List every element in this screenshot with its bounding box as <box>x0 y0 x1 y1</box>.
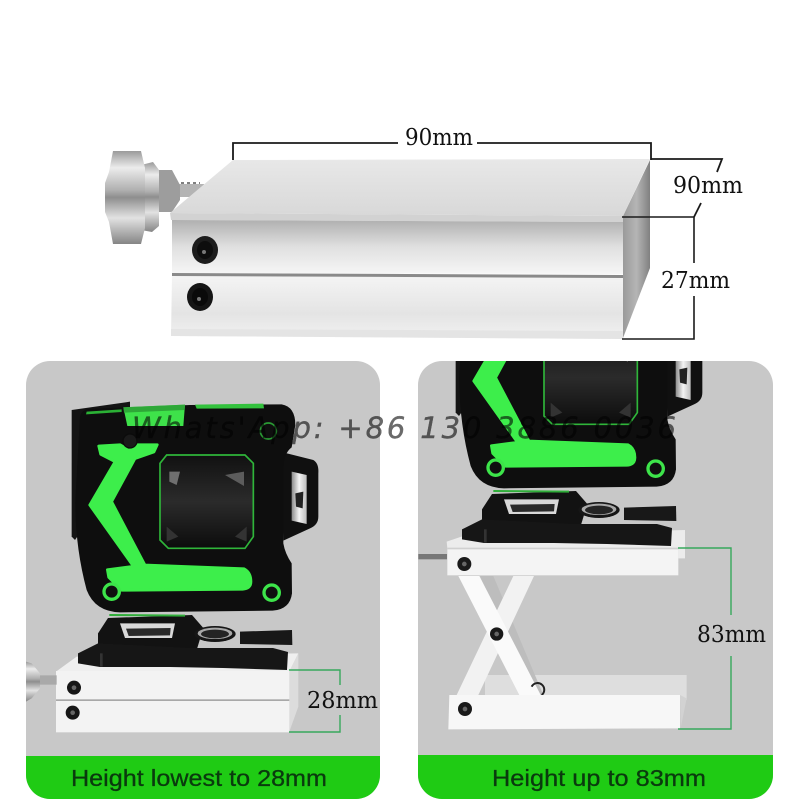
knob <box>105 151 204 244</box>
stand upper front <box>172 220 623 274</box>
dimension: depth 90mm: 90mm <box>673 173 743 199</box>
panel: maximum height <box>418 361 773 799</box>
dimension: 28mm: 28mm <box>307 688 378 714</box>
stand top face <box>170 159 650 216</box>
watermark: Whats'App: +86 130 3886 0036 <box>132 411 676 445</box>
panel: lift table dimensions <box>105 125 743 339</box>
laser level <box>72 402 318 670</box>
raised lift table <box>418 530 687 729</box>
stand right side <box>623 160 650 338</box>
stand bottom lip <box>171 329 623 339</box>
dimension: width 90mm: 90mm <box>405 125 473 151</box>
laser level (cropped) <box>456 361 702 546</box>
dimension: width 90mm <box>233 125 651 160</box>
folded lift table <box>26 653 298 732</box>
dimension: 83mm <box>678 548 766 729</box>
dimension: 28mm <box>289 670 378 732</box>
caption: Height lowest to 28mm <box>71 765 327 791</box>
dimension: depth 90mm <box>651 159 743 217</box>
caption band <box>418 755 773 800</box>
screw upper <box>192 236 218 264</box>
panel background <box>26 361 380 799</box>
dimension: 83mm: 83mm <box>697 622 766 648</box>
stand lower front <box>171 276 623 339</box>
caption: Height up to 83mm <box>492 765 706 791</box>
panel background <box>418 361 773 799</box>
caption band <box>26 756 380 800</box>
panel: lowest height <box>26 361 380 800</box>
stand seam <box>172 273 623 278</box>
dimension: height 27mm <box>622 217 730 339</box>
screw lower <box>187 283 213 311</box>
stand top lip <box>170 213 623 222</box>
dimension: height 27mm: 27mm <box>661 268 730 294</box>
